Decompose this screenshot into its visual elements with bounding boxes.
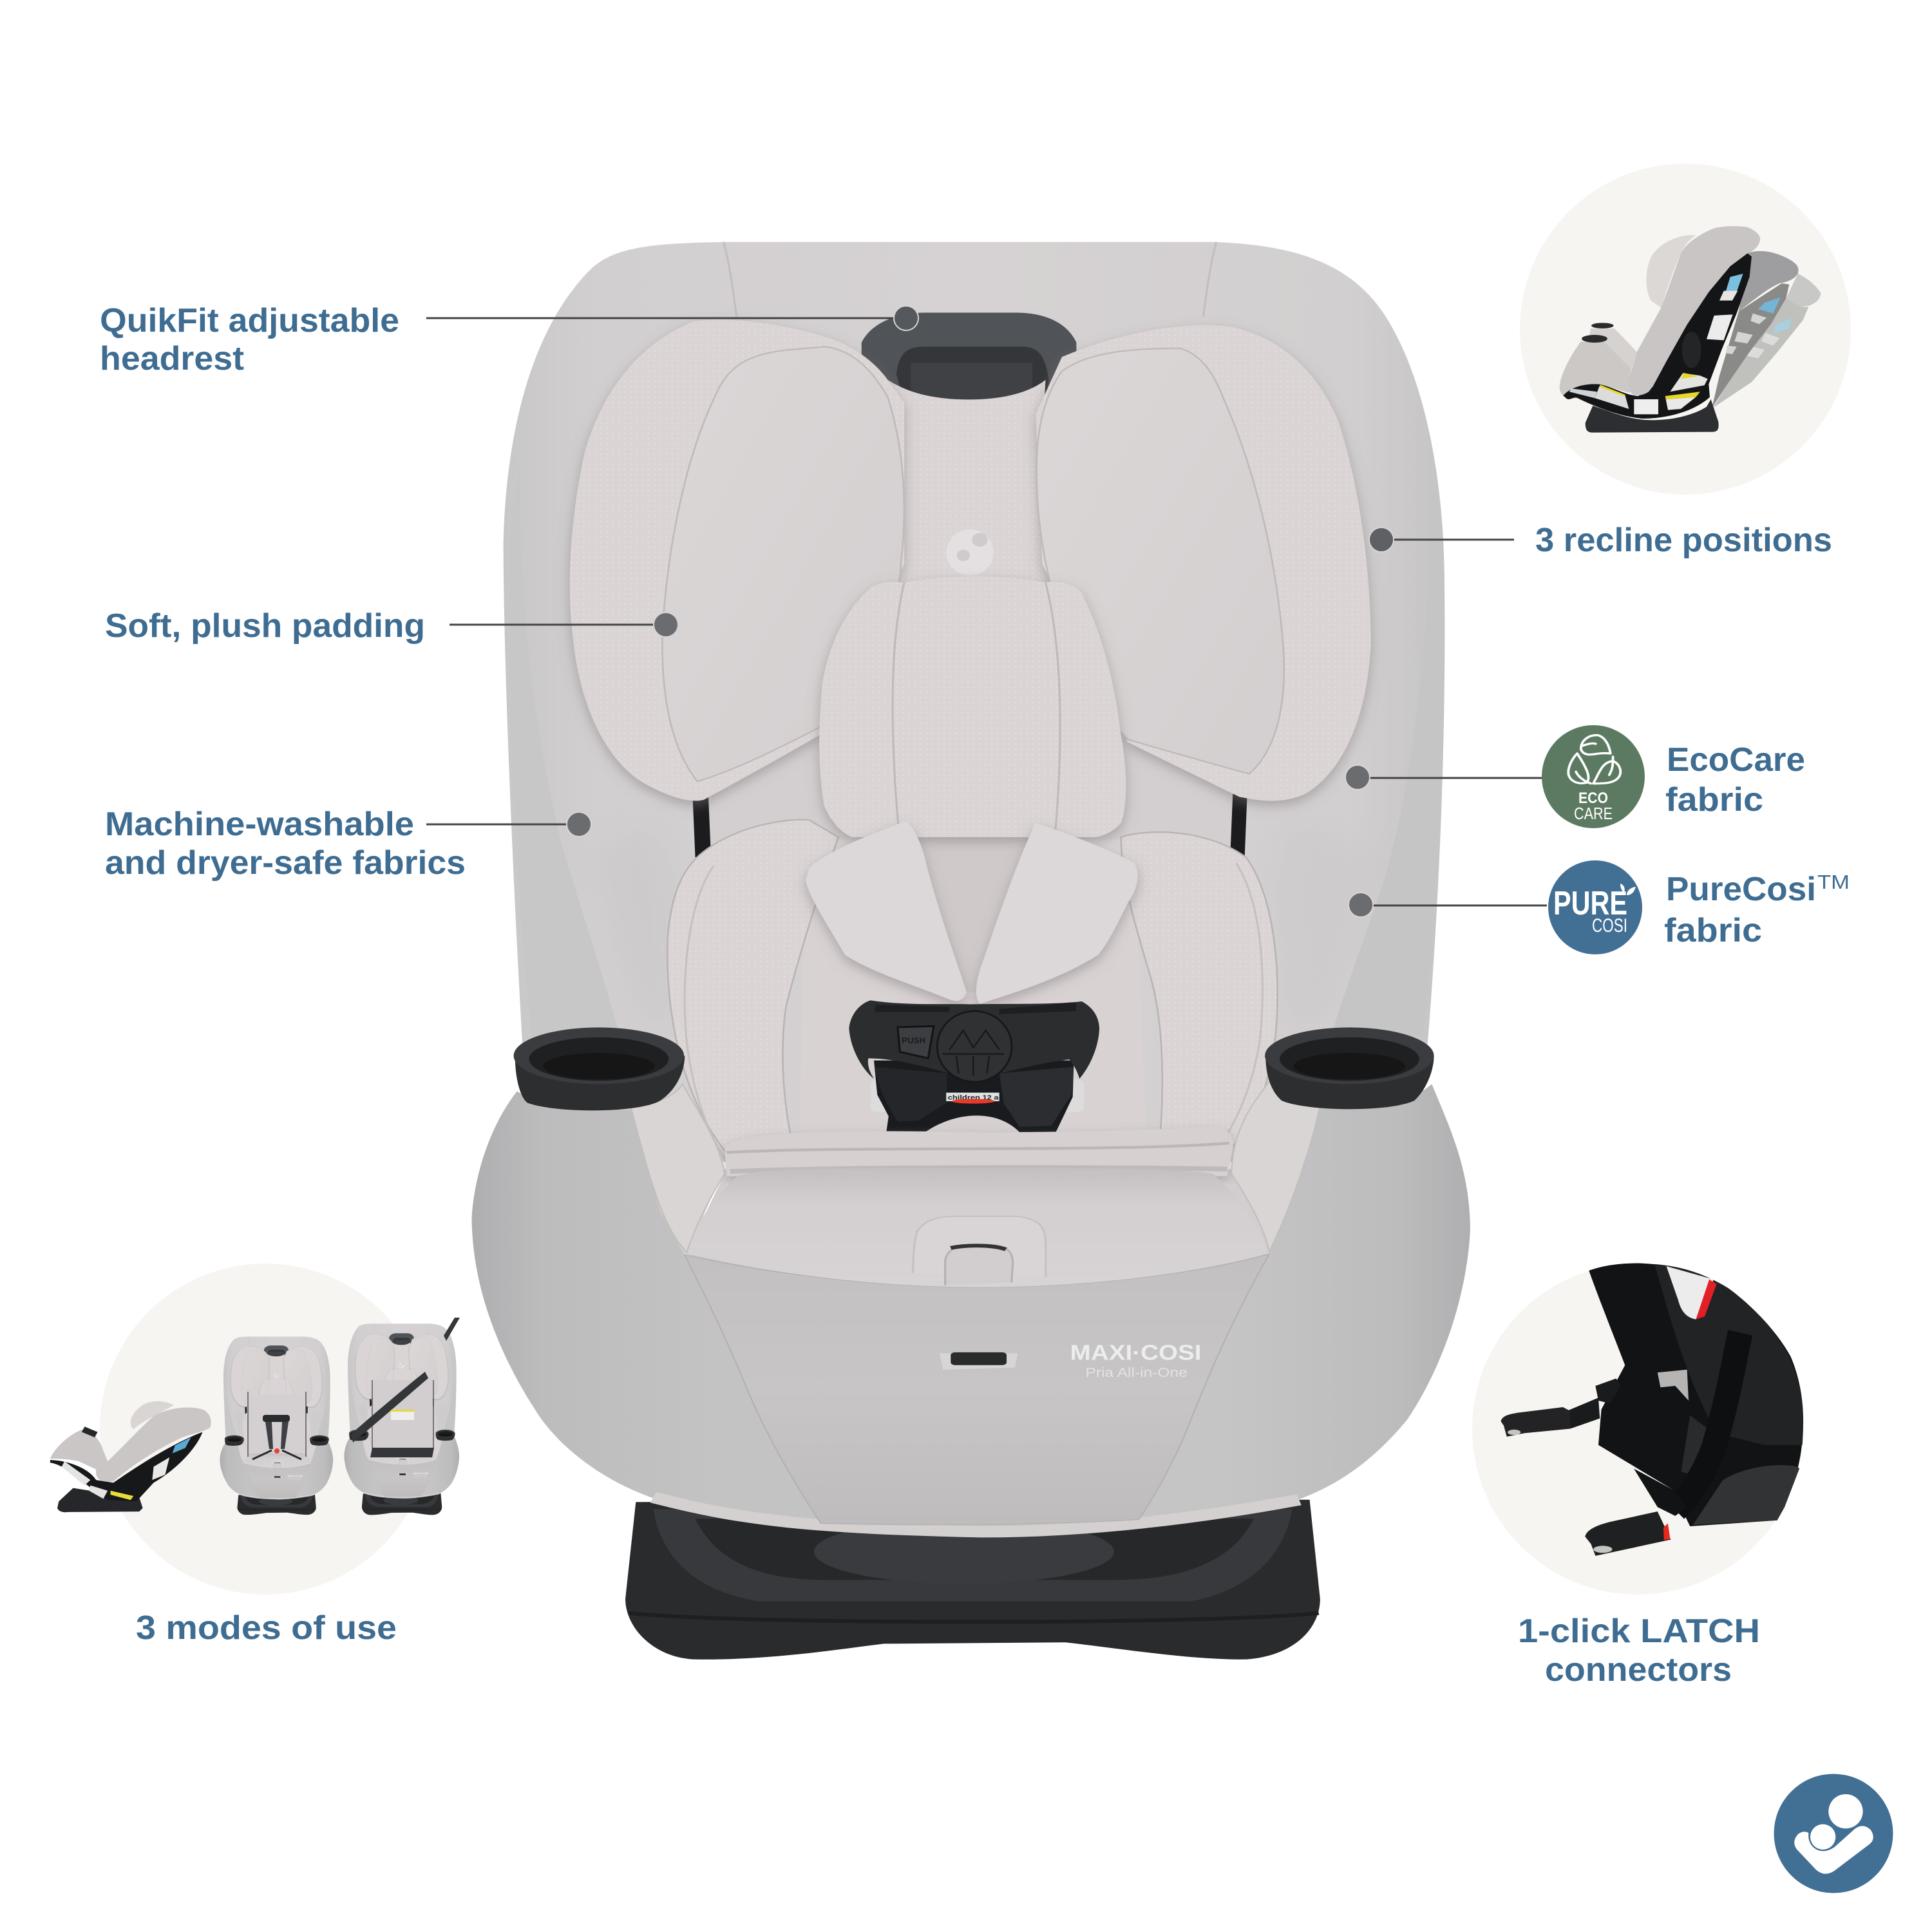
seat filler xyxy=(631,1082,1320,1256)
trademark: TM xyxy=(1817,871,1850,893)
front arm xyxy=(1560,341,1631,395)
label text line 2: and dryer-safe fabrics xyxy=(105,844,466,882)
callout: 3 recline positions xyxy=(1369,522,1832,559)
icon: parent and baby badge xyxy=(1774,1774,1893,1893)
metal bar xyxy=(1658,1370,1689,1401)
warning label xyxy=(1667,1266,1714,1320)
PUSH button text: PUSH xyxy=(902,1036,925,1045)
background circle: 3 modes of use xyxy=(100,1264,431,1595)
icon: EcoCare badge xyxy=(1542,725,1645,828)
front cup holder xyxy=(1582,335,1607,343)
black backing and underside xyxy=(1563,253,1752,419)
leader line and dot xyxy=(1369,527,1514,552)
cup holders xyxy=(1591,323,1614,328)
backrest and headrest xyxy=(504,242,1444,1168)
base xyxy=(1586,399,1719,433)
outer shell xyxy=(472,1084,1470,1535)
right wing inner panel xyxy=(1037,348,1284,774)
lower connector xyxy=(1585,1511,1671,1556)
forward-facing harness mode xyxy=(220,1336,333,1515)
belt-positioning booster mode xyxy=(344,1318,460,1515)
seat underside xyxy=(1589,1263,1803,1526)
label text line 2: fabric xyxy=(1665,781,1763,819)
left wing inner panel xyxy=(662,346,904,781)
seat shell xyxy=(1628,226,1760,395)
label text line 2: fabric xyxy=(1664,912,1762,949)
icon: PureCosi badge: COSI xyxy=(1592,915,1627,936)
leader line and dot xyxy=(1349,893,1547,917)
illustration: three modes of use xyxy=(50,1318,460,1515)
icon: EcoCare badge: ECO xyxy=(1578,790,1608,807)
label: 1-click LATCH: 1-click LATCH xyxy=(1518,1613,1760,1650)
chest pad xyxy=(819,576,1126,837)
inner back panel xyxy=(701,737,1239,869)
ghost recline position 3 xyxy=(1713,274,1821,408)
callout: PureCosi fabric xyxy=(1349,860,1850,954)
right cup holder xyxy=(1265,1027,1434,1109)
upper connector xyxy=(1501,1378,1620,1437)
left cup holder xyxy=(514,1027,685,1110)
label text: 3 recline positions xyxy=(1535,522,1832,559)
label text: EcoCare xyxy=(1667,741,1805,779)
lower bolsters xyxy=(799,840,1148,1168)
front panel xyxy=(685,1254,1269,1525)
harness chest clip and buckle xyxy=(849,1000,1099,1132)
webbing straps xyxy=(875,1067,947,1122)
buckle cover hump xyxy=(925,1115,1019,1132)
background circle: 3 recline positions xyxy=(1520,164,1851,495)
lap pad xyxy=(724,1126,1233,1176)
callout: QuikFit adjustable headrest xyxy=(100,302,918,377)
headrest spine xyxy=(888,380,1045,598)
instruction labels xyxy=(1569,274,1743,414)
illustration: reclining seat side view xyxy=(1560,226,1821,433)
label text line 2: headrest xyxy=(100,340,244,377)
callout: EcoCare fabric xyxy=(1345,725,1805,828)
ghost recline position 2 xyxy=(1712,251,1799,408)
label: connectors: connectors xyxy=(1545,1651,1732,1689)
label: 3 modes of use: 3 modes of use xyxy=(136,1609,397,1647)
left arm panel xyxy=(631,1084,724,1252)
right shoulder pad xyxy=(976,823,1138,1004)
leader line and dot xyxy=(426,306,918,330)
right head wing xyxy=(1036,325,1371,801)
rear-facing seat side view xyxy=(50,1401,211,1512)
leader line and dot xyxy=(426,812,591,837)
brand wordmark: MAXI·COSI xyxy=(1070,1341,1202,1365)
callout: machine-washable fabrics xyxy=(105,806,591,882)
model name: Pria All-in-One xyxy=(1086,1366,1188,1380)
Maxi-Cosi logo mark xyxy=(946,529,994,576)
illustration: LATCH connectors close-up xyxy=(1501,1263,1803,1556)
label text: PureCosi xyxy=(1666,871,1816,908)
callout: soft plush padding xyxy=(105,607,678,645)
left shoulder pad xyxy=(806,822,967,1001)
icon: EcoCare badge: CARE xyxy=(1574,804,1613,823)
seat base xyxy=(625,1500,1320,1660)
label text: Machine-washable xyxy=(105,806,414,843)
headrest handle xyxy=(862,313,1076,392)
icon: PureCosi badge xyxy=(1548,860,1642,954)
leader line and dot xyxy=(1345,765,1544,790)
label text: Soft, plush padding xyxy=(105,607,425,645)
main product: car seat front view xyxy=(472,242,1470,1660)
label text: QuikFit adjustable xyxy=(100,302,399,339)
strap xyxy=(1675,1332,1740,1510)
label text on buckle: children 12 a xyxy=(948,1095,999,1101)
shell bottom trim xyxy=(653,1497,1299,1532)
leader line and dot xyxy=(450,612,678,637)
headrest xyxy=(1646,235,1696,308)
icon: PureCosi badge: PURE xyxy=(1553,885,1627,922)
right arm panel xyxy=(1231,1082,1320,1252)
crotch strap flap xyxy=(913,1217,1046,1277)
rear arm xyxy=(1589,328,1637,369)
background circle: LATCH connectors xyxy=(1472,1264,1803,1595)
seat bowl, cushion and cup holders xyxy=(472,1027,1470,1535)
left head wing xyxy=(570,320,904,800)
seat cushion xyxy=(685,1168,1269,1287)
front handle slot xyxy=(940,1353,1018,1370)
